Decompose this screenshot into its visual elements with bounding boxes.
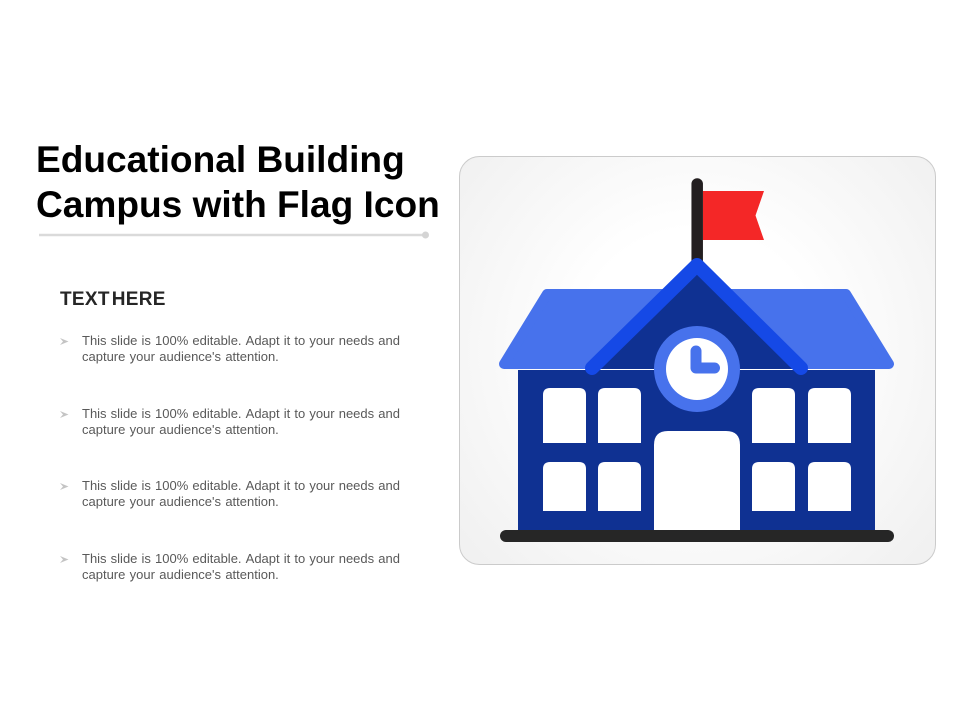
- bullet 3: editable.: [192, 478, 242, 493]
- bullet 2: to: [294, 406, 305, 421]
- bullet 3: your: [130, 494, 155, 509]
- bullet 2: editable.: [192, 406, 242, 421]
- main roof: [504, 294, 889, 364]
- bullet 4: and: [378, 551, 400, 566]
- bullet 4: is: [142, 551, 151, 566]
- bullet 3: to: [294, 478, 305, 493]
- red flag: [703, 191, 764, 240]
- bullet 1: and: [378, 333, 400, 348]
- bullet 1: your: [309, 333, 335, 348]
- bullet 4: attention.: [225, 567, 279, 582]
- bullet 2: This: [82, 406, 107, 421]
- bullet 3: capture: [82, 494, 125, 509]
- bullet 4: [60, 551, 400, 582]
- bullet 3: needs: [339, 478, 374, 493]
- bullet 4: This: [82, 551, 107, 566]
- bullet 1: editable.: [192, 333, 242, 348]
- bullet 2: needs: [339, 406, 374, 421]
- bullet 3: This: [82, 478, 107, 493]
- bullet 2: [60, 406, 400, 437]
- bullet 3: your: [309, 478, 335, 493]
- bullet 2: Adapt: [246, 406, 280, 421]
- windows: [543, 388, 851, 511]
- bullet 4: slide: [111, 551, 137, 566]
- bullet 3: slide: [111, 478, 137, 493]
- bullet 4: it: [284, 551, 290, 566]
- building body: [518, 370, 875, 531]
- gable trim: [592, 265, 801, 368]
- bullet 3: Adapt: [246, 478, 280, 493]
- bullet 2: capture: [82, 422, 125, 437]
- flag pole: [691, 184, 703, 266]
- title: Campus with Flag Icon: [36, 183, 440, 225]
- bullet 1: [60, 333, 400, 364]
- gable front: [592, 265, 800, 369]
- bullet 2: your: [130, 422, 155, 437]
- bullet 3: attention.: [225, 494, 279, 509]
- bullet 1: attention.: [225, 349, 279, 364]
- bullet 4: to: [294, 551, 305, 566]
- panel: icon background: [459, 156, 936, 565]
- bullet 1: your: [130, 349, 155, 364]
- bullet 2: and: [378, 406, 400, 421]
- bullet 3: [60, 478, 400, 509]
- bullet 1: is: [142, 333, 151, 348]
- bullet 3: audience's: [159, 494, 221, 509]
- subheading: TEXT HERE: [60, 289, 166, 310]
- bullet 2: 100%: [155, 406, 188, 421]
- bullet 3: it: [284, 478, 290, 493]
- bullet 4: your: [130, 567, 155, 582]
- title underline with dot: [39, 232, 429, 238]
- bullet 1: capture: [82, 349, 125, 364]
- bullet 4: editable.: [192, 551, 242, 566]
- bullet 2: your: [309, 406, 335, 421]
- bullet 2: audience's: [159, 422, 221, 437]
- title: [36, 138, 440, 225]
- clock: [654, 326, 740, 412]
- bullet 2: attention.: [225, 422, 279, 437]
- door: [654, 431, 740, 531]
- bullet 1: it: [284, 333, 290, 348]
- bullet 1: needs: [339, 333, 374, 348]
- bullet 4: 100%: [155, 551, 188, 566]
- ground bar: [500, 530, 894, 542]
- bullet 2: is: [142, 406, 151, 421]
- bullet 1: This: [82, 333, 107, 348]
- title: Educational Building: [36, 138, 405, 180]
- bullet 3: 100%: [155, 478, 188, 493]
- bullet 4: your: [309, 551, 335, 566]
- bullet 2: slide: [111, 406, 137, 421]
- bullet 1: to: [294, 333, 305, 348]
- bullet 4: Adapt: [246, 551, 280, 566]
- bullet 4: audience's: [159, 567, 221, 582]
- bullet 1: slide: [111, 333, 137, 348]
- bullet 4: needs: [339, 551, 374, 566]
- bullet 1: Adapt: [246, 333, 280, 348]
- bullet 1: audience's: [159, 349, 221, 364]
- bullet 4: capture: [82, 567, 125, 582]
- icon: school building: [500, 184, 894, 542]
- bullet 1: 100%: [155, 333, 188, 348]
- bullet 3: and: [378, 478, 400, 493]
- bullet 2: it: [284, 406, 290, 421]
- bullet 3: is: [142, 478, 151, 493]
